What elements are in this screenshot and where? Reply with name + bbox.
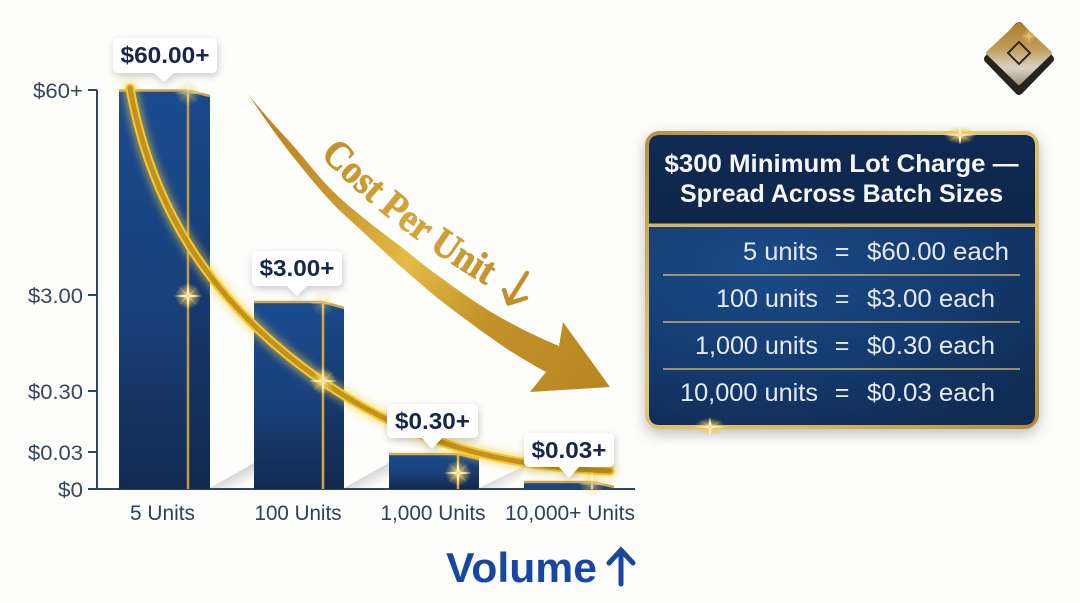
floor shadows: [210, 463, 524, 488]
category labels: 1,000 Units: [380, 502, 486, 525]
y axis labels: $3.00: [28, 285, 83, 308]
bar: 1,000 units: [389, 454, 479, 489]
row: 100 units: =: [835, 285, 849, 313]
y axis labels: $60+: [33, 80, 83, 103]
row: 5 units: [743, 238, 1009, 266]
y axis labels: [28, 80, 83, 502]
row: 5 units: $60.00 each: [867, 238, 1009, 266]
bar: 5 units: [119, 90, 210, 489]
y axis: [88, 90, 635, 489]
category labels: [130, 502, 635, 525]
row: 100 units: $3.00 each: [867, 285, 995, 313]
panel body background: [649, 227, 1035, 425]
y axis labels: $0.30: [28, 381, 83, 404]
panel heading: $300 Minimum Lot Charge —: [664, 150, 1018, 178]
row: 10,000 units: $0.03 each: [867, 379, 995, 407]
callout: $3.00+: $3.00+: [260, 255, 334, 281]
panel header background: [649, 135, 1035, 224]
row: 1,000 units: =: [835, 332, 849, 360]
y axis labels: $0.03: [28, 442, 83, 465]
callout: $0.30+: $0.30+: [395, 408, 470, 434]
callout: $60.00+: $60.00+: [120, 42, 210, 68]
callout: $0.03+: $0.03+: [532, 437, 606, 463]
panel sparkles: [693, 125, 977, 437]
row: 5 units: 5 units: [743, 238, 818, 266]
row: 1,000 units: [695, 332, 995, 360]
callout: $3.00+: [252, 251, 342, 296]
row: 1,000 units: $0.30 each: [867, 332, 995, 360]
bar: 10,000+ units: [524, 482, 614, 489]
large cost per unit arrow: [248, 94, 610, 392]
bar chart: [28, 38, 635, 525]
gold cost curve: [130, 88, 610, 471]
row: 10,000 units: 10,000 units: [680, 379, 818, 407]
icon: gold diamond logo: [988, 24, 1050, 91]
row: 100 units: 100 units: [716, 285, 818, 313]
icon: down arrow: [504, 273, 527, 304]
panel heading: Spread Across Batch Sizes: [680, 180, 1003, 208]
row: 10,000 units: [680, 379, 995, 407]
bar: 100 units: [254, 302, 344, 489]
category labels: 100 Units: [254, 502, 342, 525]
header divider: [648, 224, 1036, 227]
arrow label: cost per unit: Cost Per Unit: [325, 142, 496, 285]
callout: $0.03+: [524, 433, 614, 478]
panel heading: [664, 150, 1018, 208]
category labels: 5 Units: [130, 502, 195, 525]
callout: $60.00+: [113, 38, 217, 82]
row dividers: [663, 275, 1020, 369]
row: 1,000 units: 1,000 units: [695, 332, 818, 360]
panel: lot charge table: [646, 125, 1038, 437]
callout: $0.30+: [387, 404, 478, 449]
icon: up arrow: [609, 550, 633, 584]
row: 5 units: =: [835, 238, 849, 266]
row: 10,000 units: =: [835, 379, 849, 407]
row: 100 units: [716, 285, 995, 313]
category labels: 10,000+ Units: [505, 502, 635, 525]
volume label: Volume: [446, 544, 597, 591]
sparkles: [174, 79, 606, 498]
y axis labels: $0: [58, 479, 83, 502]
